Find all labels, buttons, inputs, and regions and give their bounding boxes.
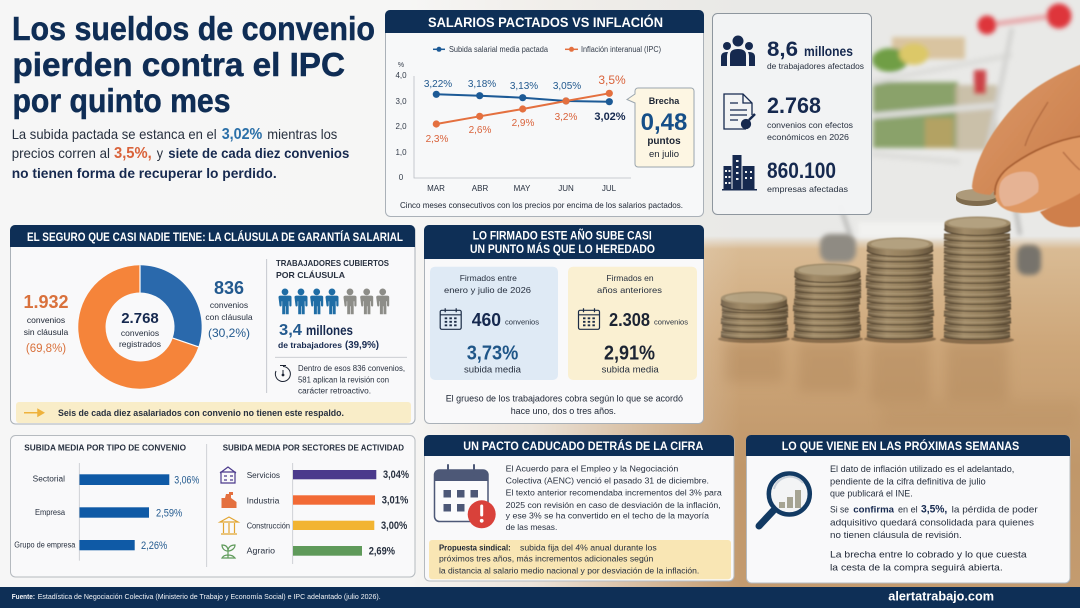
- card: firmados anos anteriores: años anteriores: [597, 285, 662, 295]
- panel header: [424, 225, 704, 259]
- inflation value labels: [426, 73, 626, 145]
- y axis labels: %: [398, 62, 404, 69]
- workers covered heading: POR CLÁUSULA: [276, 270, 345, 280]
- stat: convenios: 2.768: [767, 93, 821, 118]
- label: con clausula: 836: [214, 278, 244, 298]
- wage value labels: 3,05%: [553, 81, 581, 92]
- icon: calendar: [440, 308, 461, 329]
- callout: brecha: [627, 88, 694, 167]
- body text: 3,5%,: [921, 504, 947, 516]
- body text: [830, 464, 1038, 574]
- callout: brecha: puntos: [647, 136, 681, 147]
- main title: pierden contra el IPC: [12, 46, 345, 83]
- wage value labels: 3,18%: [468, 79, 496, 90]
- label: sin clausula: (69,8%): [26, 343, 66, 355]
- subtitle: y: [157, 145, 163, 161]
- panel header: [424, 435, 734, 456]
- stat: convenios: convenios con efectos: [767, 120, 853, 130]
- body text: El dato de inflación utilizado es el adelantado,: [830, 464, 1014, 474]
- icon row: workers: [278, 288, 389, 314]
- inflation value labels: 3,2%: [555, 112, 578, 123]
- bar chart: tipo de convenio: Grupo de empresa: [14, 541, 76, 550]
- subtitle: 3,5%,: [114, 145, 152, 162]
- donut centre label: [119, 310, 161, 349]
- bar chart: sectores: Industria: [247, 495, 280, 505]
- stat: trabajadores: [767, 38, 864, 71]
- month labels: MAR: [427, 184, 445, 193]
- panel: lo firmado este ano: [424, 225, 704, 424]
- label: con clausula: (30,2%): [208, 326, 250, 340]
- bar chart: tipo de convenio: 3,06%: [174, 474, 199, 486]
- hand: [972, 64, 1080, 227]
- icon: magnifier with bars: [759, 474, 810, 526]
- month labels: JUL: [602, 184, 617, 193]
- month labels: [427, 184, 617, 193]
- panel header: [385, 10, 704, 33]
- panel: key figures: [712, 14, 872, 214]
- white fade behind left panels: [0, 0, 740, 608]
- held coin: [956, 189, 998, 206]
- card: firmados 2026: subida media: [464, 365, 521, 375]
- panel: un pacto caducado: [424, 435, 734, 581]
- source note: Fuente:: [12, 592, 35, 601]
- subtitle: mientras los: [267, 126, 337, 142]
- body text: La brecha entre lo cobrado y lo que cuesta: [830, 550, 1027, 561]
- body text: en el: [898, 505, 918, 516]
- wage value labels: 3,13%: [510, 81, 538, 92]
- stat: 3,4 millones: (39,9%): [345, 340, 379, 351]
- subtitle: [12, 126, 349, 181]
- donut chart: [78, 265, 202, 389]
- bar chart: sectores: 3,01%: [382, 495, 408, 507]
- main title: por quinto mes: [12, 82, 230, 119]
- card: firmados 2026: 3,73%: [467, 342, 518, 364]
- panel: clausula de garantia salarial: [10, 225, 415, 424]
- subtitle: no tienen forma de recuperar lo perdido.: [12, 165, 277, 181]
- stat: empresas: 860.100: [767, 158, 836, 183]
- icon: arrow: [24, 410, 44, 416]
- icon: calendar: [578, 308, 600, 329]
- bar chart: sectores: [247, 463, 409, 564]
- bar chart: sectores: 3,00%: [381, 520, 407, 532]
- panel note: hace uno, dos o tres años.: [511, 406, 616, 416]
- card: firmados anos anteriores: Firmados en: [606, 273, 654, 283]
- chart legend: Subida salarial media pactada: [449, 45, 549, 54]
- bar chart: tipo de convenio: 2,59%: [156, 507, 182, 519]
- workers covered heading: [276, 258, 389, 280]
- body text: El texto anterior recomendaba incrementos del 3% para: [506, 488, 722, 498]
- chart legend: Inflación interanual (IPC): [581, 45, 661, 54]
- body text: confirma: [853, 505, 895, 516]
- subtitle: La subida pactada se estanca en el: [12, 126, 217, 142]
- wage value labels: 3,22%: [424, 79, 452, 90]
- series: inflacion: [433, 90, 613, 128]
- icon: calendar alert: [434, 465, 496, 528]
- y axis labels: 3,0: [395, 97, 407, 106]
- line chart: [395, 62, 631, 193]
- card: firmados anos anteriores: [568, 267, 697, 380]
- callout bar: [16, 402, 411, 423]
- panel: salarios pactados vs inflacion: [385, 10, 704, 216]
- wooden table: [0, 236, 1080, 608]
- bar chart: sectores: Agrario: [247, 546, 275, 556]
- icon: workers: [721, 36, 755, 66]
- bar chart: sectores: 3,04%: [383, 469, 409, 481]
- bar chart: tipo de convenio: [14, 463, 199, 561]
- heading: por tipo: SUBIDA MEDIA POR TIPO DE CONVENIO: [24, 442, 186, 452]
- panel heading: EL SEGURO QUE CASI NADIE TIENE: LA CLÁUSULA DE GARANTÍA SALARIAL: [27, 231, 403, 244]
- bar chart: sectores: Construcción: [247, 520, 290, 530]
- chart caption: Cinco meses consecutivos con los precios por encima de los salarios pactados.: [400, 200, 683, 210]
- stat: empresas: [767, 158, 848, 194]
- body text: que publicará el INE.: [830, 489, 913, 499]
- card: firmados 2026: Firmados entre: [460, 273, 517, 283]
- wage value labels: 3,02%: [594, 111, 626, 123]
- body text: pendiente de la cifra definitiva de julio: [830, 476, 986, 486]
- stat: trabajadores: de trabajadores afectados: [767, 61, 864, 71]
- card: firmados 2026: enero y julio de 2026: [444, 285, 531, 295]
- y axis labels: 0: [399, 173, 404, 182]
- callout: propuesta sindical: Propuesta sindical:: [439, 543, 511, 553]
- icon: buildings: [722, 155, 757, 190]
- panel note: [446, 394, 683, 416]
- panel header: [10, 225, 415, 247]
- callout: propuesta sindical: [429, 540, 731, 579]
- icon: agrario: [222, 545, 235, 558]
- stat: 3,4 millones: 3,4: [279, 322, 302, 339]
- subtitle: 3,02%: [222, 126, 262, 143]
- subtitle: siete de cada diez convenios: [168, 145, 349, 161]
- panel card: [746, 436, 1070, 583]
- inflation value labels: 2,6%: [469, 125, 492, 136]
- y axis labels: 2,0: [395, 122, 407, 131]
- card: firmados anos anteriores: 2.308: [609, 310, 650, 330]
- icon: clock: [275, 366, 290, 381]
- panel heading: LO QUE VIENE EN LAS PRÓXIMAS SEMANAS: [782, 438, 1019, 453]
- panel heading: UN PACTO CADUCADO DETRÁS DE LA CIFRA: [463, 438, 704, 453]
- callout: brecha: en julio: [649, 149, 679, 160]
- heading: por sectores: SUBIDA MEDIA POR SECTORES DE ACTIVIDAD: [223, 442, 404, 452]
- body text: Colectiva (AENC) venció el pasado 31 de diciembre.: [506, 475, 709, 485]
- subtitle: precios corren al: [12, 145, 110, 161]
- note: revision retroactiva: carácter retroactivo.: [298, 387, 371, 396]
- footer bar: [0, 587, 1080, 608]
- month labels: MAY: [514, 184, 531, 193]
- site name: alertatrabajo.com: [888, 588, 994, 604]
- label: con clausula: [205, 278, 253, 340]
- donut centre label: 2.768: [121, 310, 159, 327]
- inflation value labels: 3,5%: [598, 73, 626, 87]
- donut centre label: convenios: [121, 328, 159, 338]
- callout: brecha: Brecha: [649, 96, 680, 106]
- bar chart: tipo de convenio: Sectorial: [33, 475, 65, 484]
- body text: de las mesas.: [506, 522, 557, 532]
- body text: no tienen cláusula de revisión.: [830, 530, 962, 541]
- coin stack 1: [718, 292, 790, 343]
- body text: [506, 463, 722, 532]
- panel: bar charts: [10, 436, 415, 577]
- panel card: [424, 226, 704, 424]
- y axis labels: [395, 62, 407, 182]
- note: revision retroactiva: Dentro de esos 836 convenios,: [298, 364, 405, 373]
- panel: lo que viene: [746, 435, 1070, 583]
- panel card: [386, 10, 704, 216]
- callout: propuesta sindical: la distancia al salario medio nacional y por desviación de la inflación.: [439, 565, 699, 575]
- card: firmados anos anteriores: subida media: [602, 365, 659, 375]
- workers covered heading: TRABAJADORES CUBIERTOS: [276, 258, 389, 268]
- panel card: [712, 14, 872, 214]
- donut centre label: registrados: [119, 339, 161, 349]
- bar chart: tipo de convenio: Empresa: [35, 508, 66, 517]
- blurred shopping cart: [840, 4, 1072, 235]
- callout text: Seis de cada diez asalariados con convenio no tienen este respaldo.: [58, 408, 344, 418]
- icon: signed document: [724, 94, 755, 129]
- panel heading: [470, 230, 655, 256]
- inflation value labels: 2,3%: [426, 134, 449, 145]
- callout: propuesta sindical: próximos tres años, más incrementos adicionales según: [439, 554, 653, 564]
- panel heading: LO FIRMADO ESTE AÑO SUBE CASI: [473, 230, 652, 242]
- body text: adquisitivo quedará consolidada para quienes: [830, 517, 1034, 528]
- callout: brecha: 0,48: [641, 109, 687, 136]
- body text: Si se: [830, 505, 849, 516]
- icon: construccion: [220, 517, 238, 534]
- card: firmados 2026: convenios: [505, 317, 539, 326]
- month labels: JUN: [558, 184, 574, 193]
- panel card: [424, 436, 734, 581]
- coin stack 4: [940, 216, 1014, 344]
- body text: la cesta de la compra seguirá abierta.: [830, 563, 1003, 574]
- stat: convenios: económicos en 2026: [767, 132, 849, 142]
- stat: 3,4 millones: millones: [306, 322, 353, 338]
- series: subida salarial: [433, 91, 613, 105]
- label: sin clausula: [23, 292, 69, 355]
- stat: convenios: [767, 93, 853, 142]
- y axis labels: 1,0: [395, 148, 407, 157]
- icon: industria: [222, 492, 236, 508]
- label: sin clausula: sin cláusula: [24, 327, 68, 337]
- label: sin clausula: convenios: [27, 315, 65, 325]
- card: firmados 2026: 460: [472, 310, 501, 330]
- stat: trabajadores: millones: [804, 43, 853, 59]
- source note: Estadística de Negociación Colectiva (Ministerio de Trabajo y Economía Social) e IPC adelantado (julio 2026).: [38, 592, 381, 601]
- wage value labels: [424, 79, 626, 123]
- panel card: [10, 436, 415, 577]
- stat: empresas: empresas afectadas: [767, 184, 848, 194]
- panel note: El grueso de los trabajadores cobra según lo que se acordó: [446, 394, 683, 404]
- bar chart: sectores: Servicios: [247, 470, 280, 480]
- inflation value labels: 2,9%: [512, 118, 535, 129]
- body text: la pérdida de poder: [952, 505, 1038, 516]
- body text: El Acuerdo para el Empleo y la Negociación: [506, 463, 678, 473]
- note: revision retroactiva: [298, 364, 405, 396]
- label: sin clausula: 1.932: [23, 292, 69, 312]
- y axis labels: 4,0: [395, 71, 407, 80]
- card: firmados 2026: [430, 267, 558, 380]
- body text: 2025 con revisión en caso de desviación de la inflación,: [506, 500, 721, 510]
- stat: trabajadores: 8,6: [767, 38, 798, 61]
- coin stack 2: [791, 264, 863, 343]
- blurred cart wheels: [820, 222, 1041, 275]
- panel header: [746, 435, 1070, 456]
- stat: 3,4 millones: de trabajadores: [278, 340, 342, 350]
- panel card: [10, 226, 415, 424]
- month labels: ABR: [472, 184, 488, 193]
- coin stack 3: [864, 238, 936, 343]
- body text: y ese 3% se ha convertido en el techo de la mayoría: [506, 511, 709, 521]
- panel heading: SALARIOS PACTADOS VS INFLACIÓN: [428, 15, 663, 30]
- bar chart: sectores: 2,69%: [369, 545, 395, 557]
- note: revision retroactiva: 581 aplican la revisión con: [298, 375, 389, 384]
- label: con clausula: convenios: [210, 300, 248, 310]
- card: firmados anos anteriores: 2,91%: [604, 342, 655, 364]
- panel heading: UN PUNTO MÁS QUE LO HEREDADO: [470, 243, 655, 256]
- callout: propuesta sindical: subida fija del 4% anual durante los: [520, 543, 657, 553]
- main title: Los sueldos de convenio: [12, 10, 375, 47]
- main title: [12, 10, 375, 119]
- icon: servicios: [220, 467, 236, 483]
- card: firmados anos anteriores: convenios: [654, 317, 688, 326]
- coin reflections on table: [724, 342, 1080, 430]
- bar chart: tipo de convenio: 2,26%: [141, 540, 167, 552]
- stat: 3,4 millones: [278, 322, 379, 351]
- label: con clausula: con cláusula: [205, 312, 253, 322]
- chart legend: [433, 45, 661, 54]
